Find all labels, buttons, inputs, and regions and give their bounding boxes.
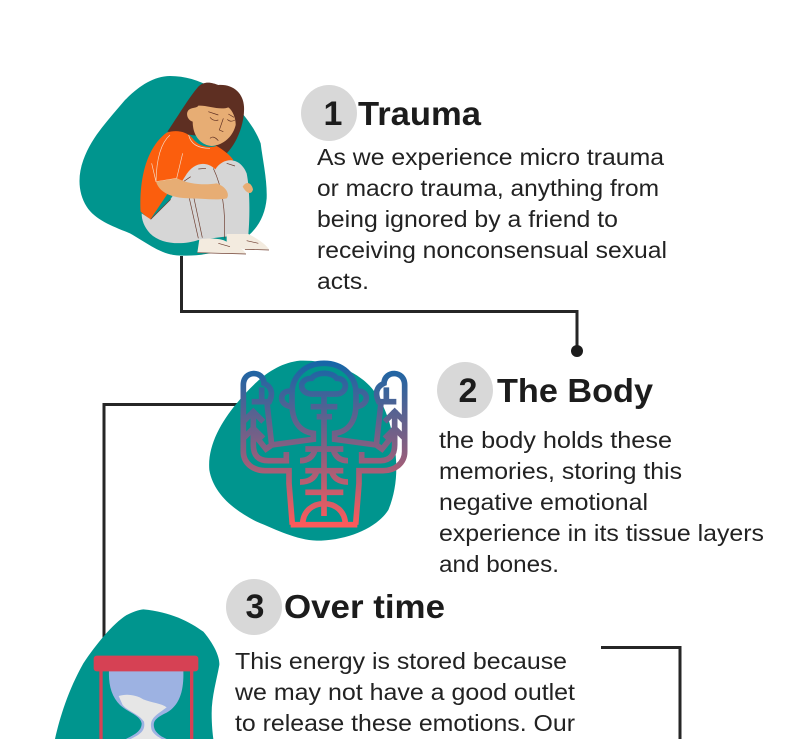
- blob: [80, 76, 267, 256]
- body text: the body: the body holds these: [439, 427, 672, 453]
- number 1: 1: [324, 95, 342, 133]
- step 3: over time: [226, 579, 576, 736]
- icon: hourglass: [55, 609, 219, 739]
- connector: over time onward: [601, 648, 680, 739]
- sand: [119, 695, 167, 739]
- number badge 2: [437, 362, 493, 418]
- left half: [243, 363, 324, 525]
- body text: trauma: being ignored by a friend to: [317, 206, 618, 232]
- number badge 3: [226, 579, 282, 635]
- body text: trauma: acts.: [317, 268, 369, 294]
- number 2: 2: [459, 372, 477, 410]
- body text: over time: This energy is stored because: [235, 648, 567, 674]
- body text: the body: and bones.: [439, 551, 559, 577]
- heading: the body: The Body: [497, 372, 654, 409]
- icon: seated sad woman: [80, 76, 269, 256]
- step 2: the body: [437, 362, 764, 577]
- body text: over time: [234, 648, 576, 736]
- shirt: [140, 131, 233, 220]
- body text: the body: experience in its tissue layers: [439, 520, 764, 546]
- heading: over time: Over time: [284, 588, 445, 625]
- frame posts: [99, 668, 193, 739]
- body text: trauma: [317, 144, 667, 294]
- body text: over time: we may not have a good outlet: [234, 679, 576, 705]
- body text: the body: [439, 427, 764, 577]
- blob: [209, 361, 396, 541]
- connector end dot: [571, 345, 583, 357]
- connector: trauma to body: [182, 256, 577, 350]
- number 3: 3: [246, 588, 264, 626]
- body text: trauma: receiving nonconsensual sexual: [317, 237, 667, 263]
- anatomy outline: [243, 363, 405, 525]
- body text: trauma: As we experience micro trauma: [317, 144, 664, 170]
- body text: the body: memories, storing this: [439, 458, 682, 484]
- blob: [55, 609, 219, 739]
- legs: [142, 160, 249, 243]
- body text: trauma: or macro trauma, anything from: [317, 175, 659, 201]
- number badge 1: [301, 85, 357, 141]
- hair: [167, 83, 244, 153]
- glass: [109, 671, 183, 739]
- right half: [324, 363, 405, 525]
- heading: trauma: Trauma: [358, 95, 482, 132]
- icon: body skeleton: [209, 361, 405, 541]
- body text: over time: to release these emotions. Our: [235, 710, 575, 736]
- face: [187, 106, 236, 146]
- arm: [156, 178, 228, 199]
- shoes: [227, 234, 269, 250]
- connector: body to over time: [104, 404, 242, 640]
- frame top: [94, 656, 198, 671]
- body text: the body: negative emotional: [439, 489, 648, 515]
- step 1: trauma: [301, 85, 667, 294]
